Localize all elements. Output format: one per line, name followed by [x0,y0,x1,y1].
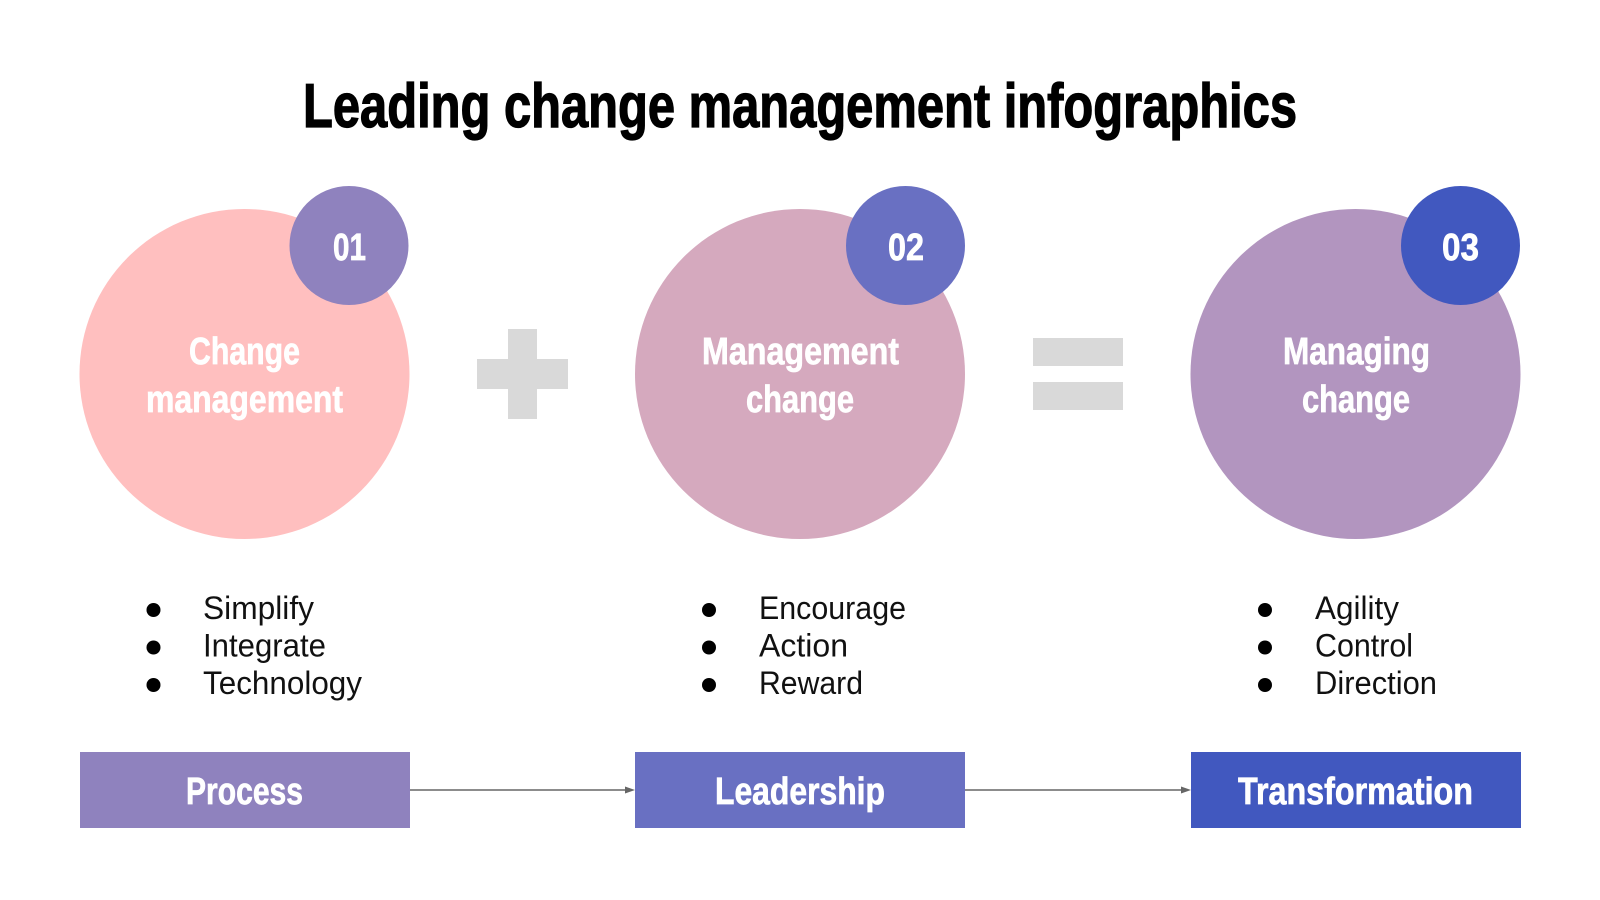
bullet list: encourage, action, reward [702,590,906,701]
circle label: management change: change [746,379,854,421]
circle: management change [635,209,965,539]
badge: 01 [290,186,408,305]
box: transformation: Transformation [1238,771,1473,813]
panel: change management [80,186,410,828]
icon: equals sign [1033,338,1123,410]
bullet list: agility, control, direction [1258,590,1437,701]
bullet list: simplify, integrate, technology: Integrate [203,628,326,664]
circle label: change management: management [146,379,343,421]
circle label: managing change: Managing [1283,331,1430,373]
circle label: change management [146,331,343,421]
box: leadership: Leadership [715,771,885,813]
bullet list: agility, control, direction: Direction [1315,665,1437,701]
panel: managing change [1190,186,1521,828]
circle label: managing change [1283,331,1430,421]
bullet list: encourage, action, reward: Encourage [759,590,906,626]
arrow: process to leadership [410,786,635,794]
badge: 02 [846,186,965,305]
bullet list: simplify, integrate, technology: Simplify [203,590,314,626]
circle: change management [80,209,410,539]
circle: managing change [1190,209,1520,539]
circle label: change management: Change [189,331,300,373]
box: process: Process [186,771,303,813]
badge: 03: 03 [1442,227,1479,269]
circle label: managing change: change [1302,379,1410,421]
badge: 03 [1401,186,1520,305]
icon: plus sign [477,329,568,419]
badge: 01: 01 [333,227,366,269]
box: transformation [1191,752,1521,828]
circle label: management change: Management [702,331,899,373]
bullet list: agility, control, direction: Control [1315,628,1413,664]
bullet list: encourage, action, reward: Action [759,628,848,664]
badge: 02: 02 [888,227,924,269]
box: leadership [635,752,965,828]
panel: management change [635,186,965,828]
circle label: management change [702,331,899,421]
box: process [80,752,410,828]
title: Leading change management infographics [303,72,1297,141]
arrow: leadership to transformation [965,786,1191,794]
bullet list: agility, control, direction: Agility [1315,590,1399,626]
bullet list: simplify, integrate, technology [146,590,362,701]
bullet list: encourage, action, reward: Reward [759,665,863,701]
bullet list: simplify, integrate, technology: Technology [203,665,362,701]
